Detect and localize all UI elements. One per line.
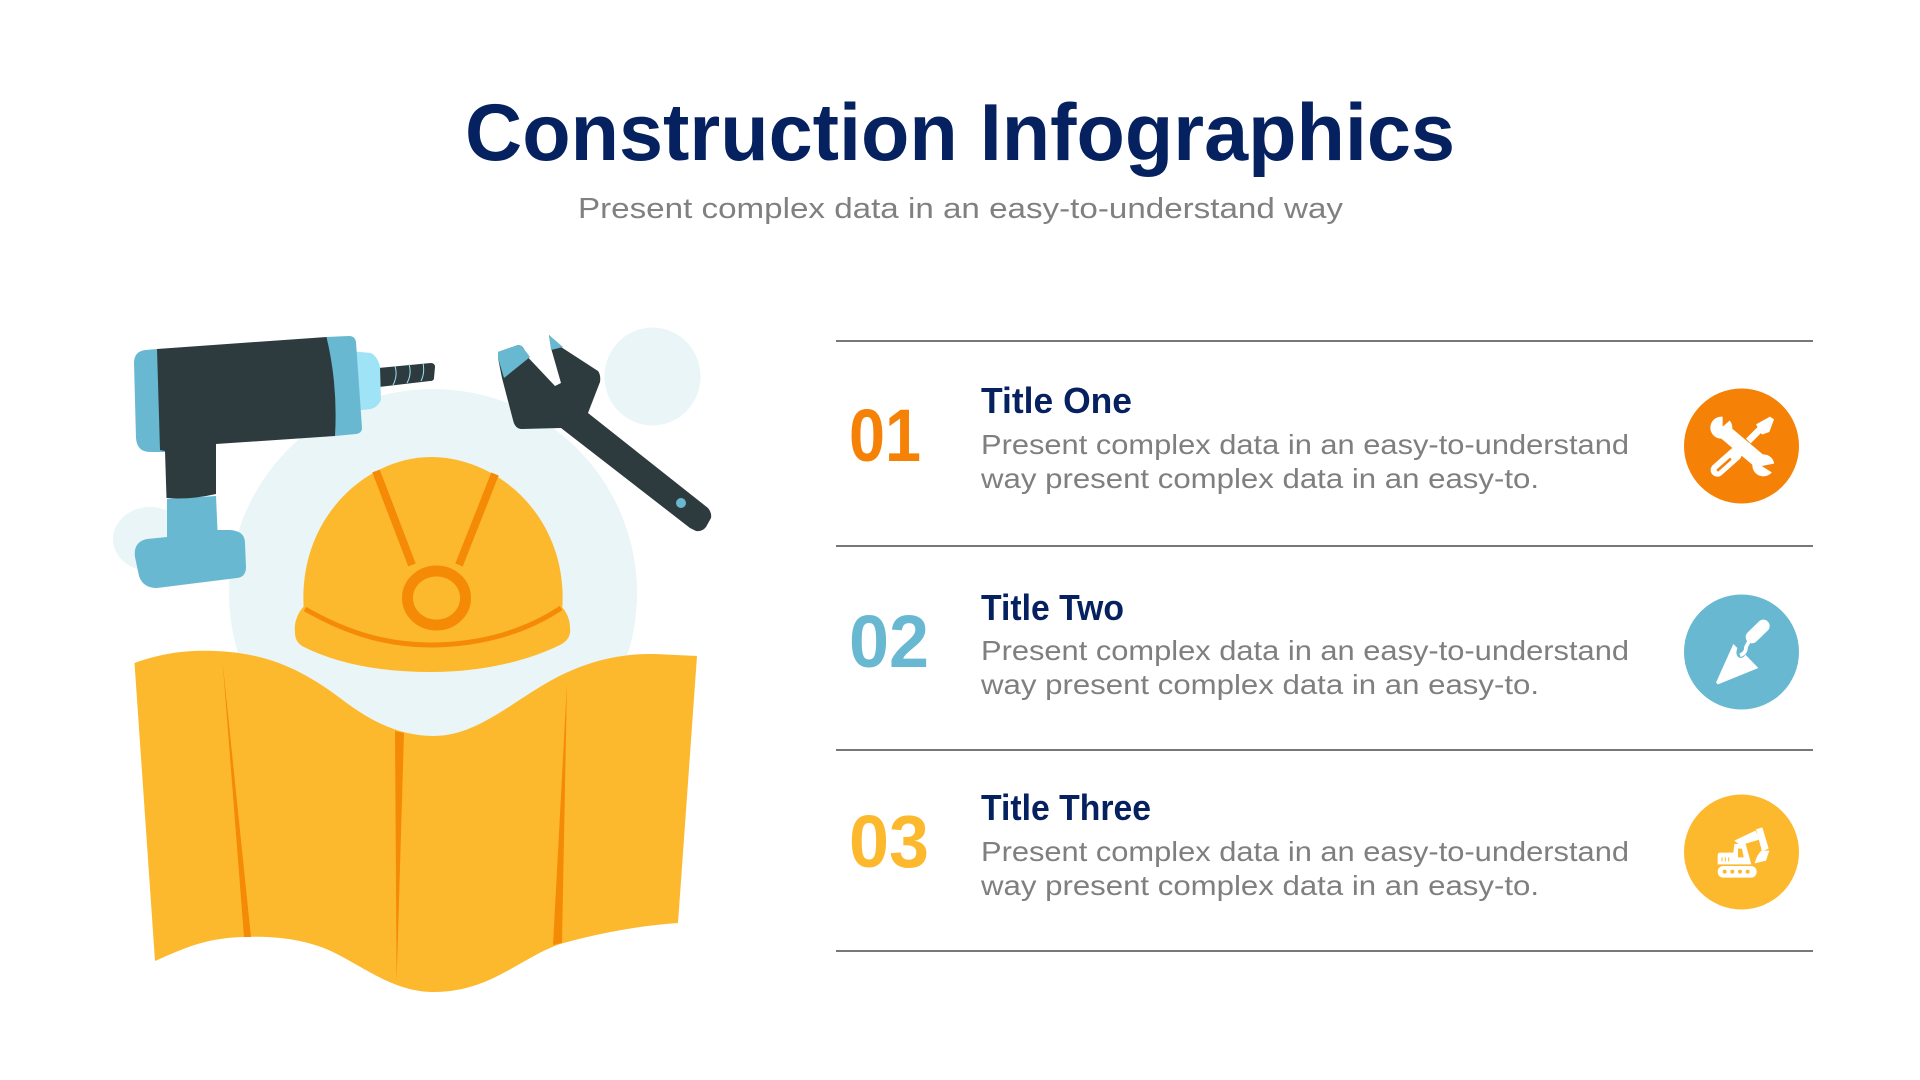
illustration: construction tools and plans xyxy=(113,328,711,992)
icon: hard hat xyxy=(295,457,570,672)
background circle: large xyxy=(229,389,637,797)
item three xyxy=(849,787,1799,910)
description two: Present complex data in an easy-to-understand xyxy=(981,635,1629,666)
icon: blueprint map xyxy=(134,651,697,992)
icon: tools in orange circle xyxy=(1684,388,1799,504)
background circle: top right xyxy=(604,328,700,426)
title: Construction Infographics xyxy=(465,88,1455,178)
description three: Present complex data in an easy-to-understand xyxy=(981,836,1629,867)
description three: way present complex data in an easy-to. xyxy=(980,870,1539,901)
heading: title one: Title One xyxy=(981,380,1132,421)
item two xyxy=(849,587,1799,710)
description one: way present complex data in an easy-to. xyxy=(980,463,1539,494)
heading: title two: Title Two xyxy=(981,587,1124,628)
number 02: 02 xyxy=(849,600,929,683)
description two: way present complex data in an easy-to. xyxy=(980,669,1539,700)
icon: excavator in yellow circle xyxy=(1684,794,1799,910)
subtitle: Present complex data in an easy-to-understand way xyxy=(578,193,1344,225)
heading: title three: Title Three xyxy=(981,787,1151,828)
item one xyxy=(849,380,1799,504)
number 03: 03 xyxy=(849,800,929,883)
description one: Present complex data in an easy-to-understand xyxy=(981,429,1629,460)
number 01: 01 xyxy=(849,394,921,477)
divider lines xyxy=(836,341,1813,951)
background circle: left xyxy=(113,507,187,571)
icon: power drill xyxy=(134,336,435,588)
icon: wrench xyxy=(498,335,711,531)
icon: trowel in blue circle xyxy=(1684,594,1799,710)
